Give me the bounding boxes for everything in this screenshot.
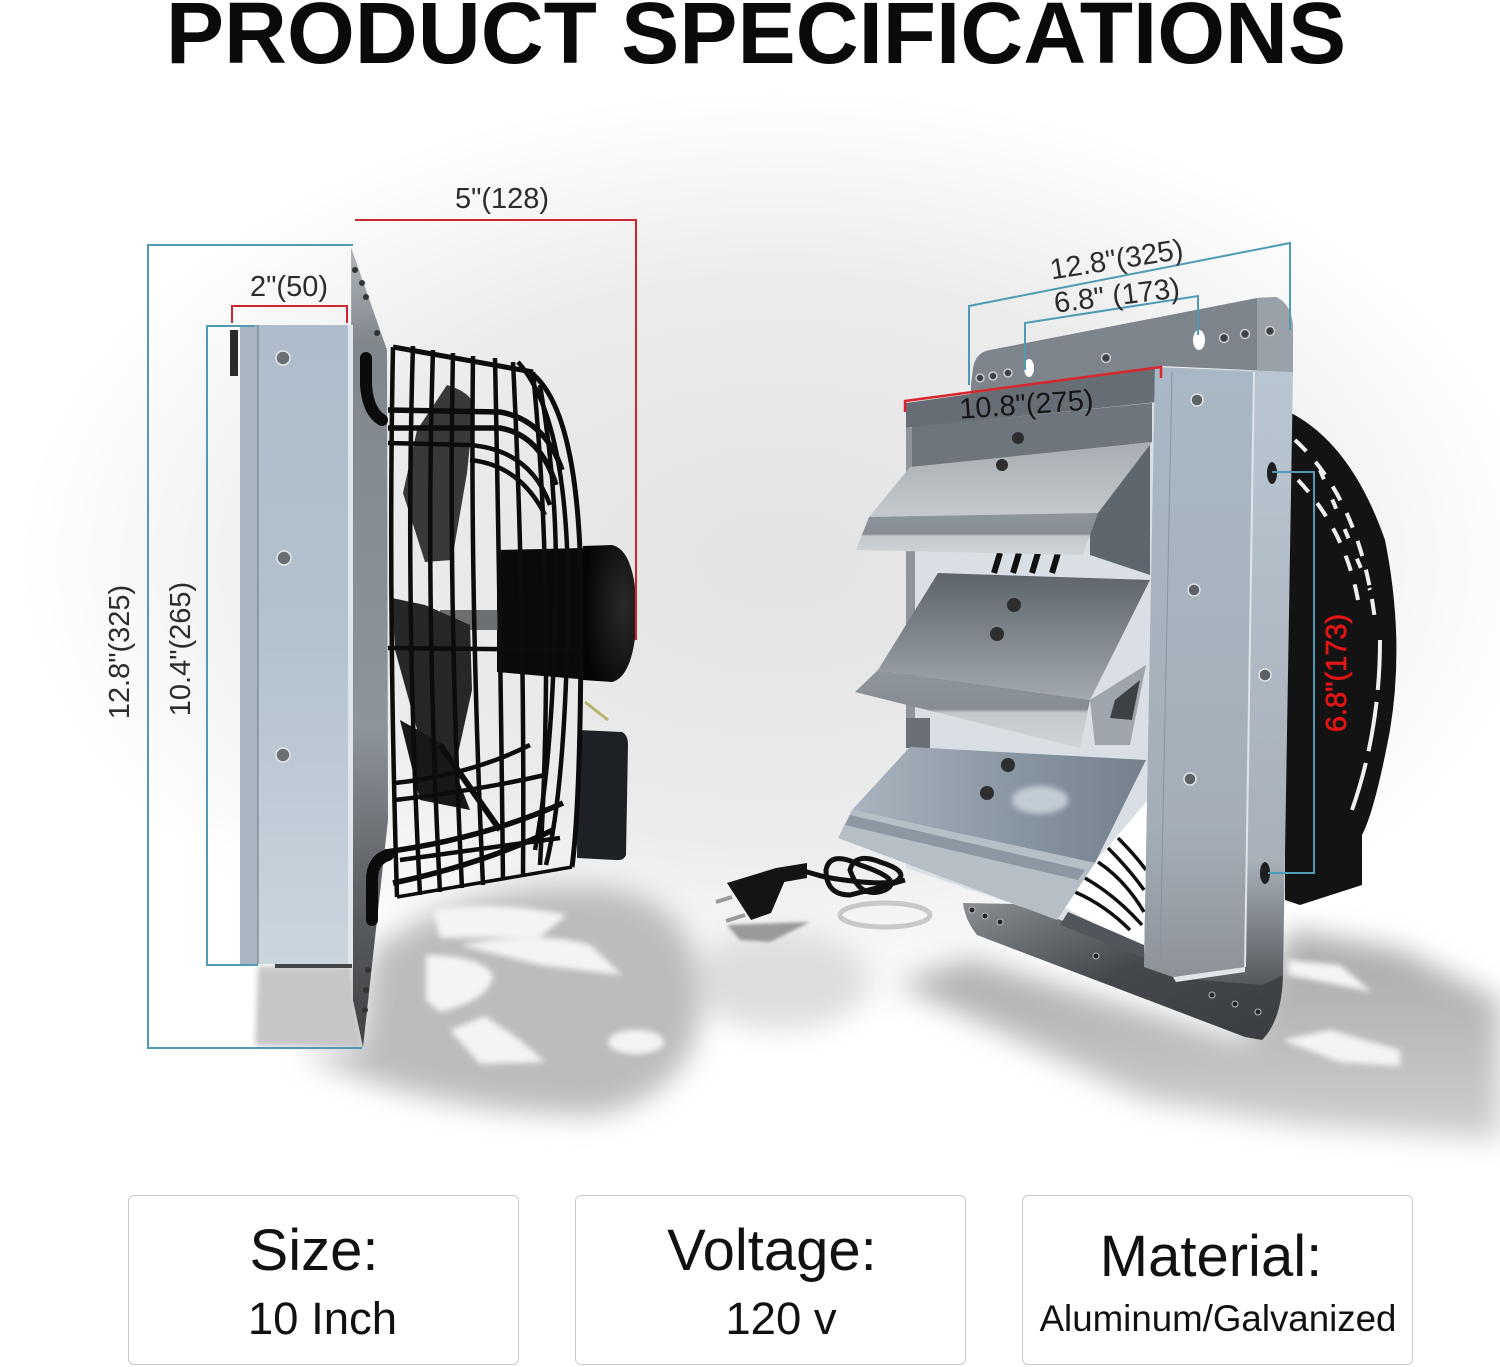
motor box [577, 730, 628, 860]
fan blades [392, 385, 474, 810]
motor [440, 545, 637, 720]
top flange [971, 297, 1293, 395]
louver 1 [856, 403, 1152, 555]
spec card: material: Material: [1100, 1224, 1322, 1289]
shadow pattern: light through grille [426, 906, 1400, 1066]
side housing [230, 325, 353, 968]
dimension labels: 12.8"(325) [1048, 234, 1185, 286]
dimension labels: 10.4"(265) [165, 582, 197, 716]
power cord and plug [716, 858, 905, 921]
opening [906, 370, 1155, 950]
spec card: material: Aluminum/Galvanized [1040, 1298, 1396, 1339]
dimension labels: 2"(50) [250, 271, 328, 303]
right fan: louver view [716, 297, 1396, 1040]
spec card: size: 10 Inch [248, 1293, 397, 1344]
bottom flange [963, 903, 1283, 1040]
spec card: size [128, 1195, 519, 1365]
dimension lines: right fan [905, 243, 1314, 873]
fan blades behind opening [994, 553, 1058, 573]
grille wires [378, 346, 581, 897]
floor shadows [255, 886, 1500, 1140]
dimension lines: left fan [148, 220, 636, 1048]
dimension labels: 6.8"(173) [1321, 614, 1353, 732]
front frame [1144, 367, 1293, 985]
dimension labels: 5"(128) [455, 183, 549, 215]
dimension labels [104, 183, 1353, 732]
fan blades through lower opening [1060, 800, 1148, 958]
rear grille [1285, 410, 1396, 905]
dimension labels: 6.8" (173) [1052, 272, 1182, 320]
flange hooks [366, 358, 388, 920]
louver 2 [855, 573, 1150, 748]
mounting flange [351, 247, 388, 1047]
frame top band [906, 367, 1161, 428]
spec card: voltage [575, 1195, 966, 1365]
spec card: voltage: Voltage: [667, 1218, 877, 1283]
spec card: size: Size: [250, 1218, 378, 1283]
dimension labels: 10.8"(275) [958, 384, 1095, 426]
spec card: material [1022, 1195, 1413, 1365]
spec card: voltage: 120 v [725, 1293, 837, 1344]
dark interior [1090, 440, 1150, 575]
louver 3 [838, 747, 1146, 920]
left fan: side view [230, 247, 637, 1047]
dimension labels: 12.8"(325) [104, 585, 136, 719]
left frame strip [906, 428, 915, 748]
flange holes [352, 267, 380, 1013]
